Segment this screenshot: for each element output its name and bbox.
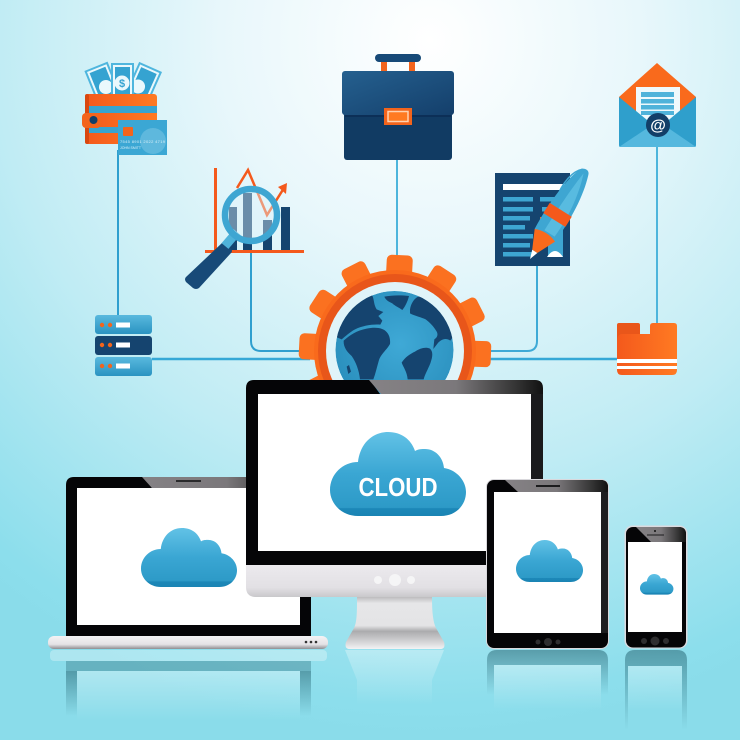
- laptop cloud: [141, 528, 237, 587]
- laptop reflection: [50, 650, 327, 721]
- connector lines: [118, 147, 657, 359]
- tablet screen: [494, 492, 601, 633]
- chart axes: [205, 168, 304, 253]
- tablet buttons: [536, 638, 560, 646]
- monitor chin: [246, 565, 543, 597]
- credit card: [118, 120, 167, 155]
- phone screen: [628, 542, 682, 632]
- cloud with label: CLOUD: [358, 472, 438, 502]
- icon: envelope with at sign: @: [650, 118, 666, 134]
- wallet body: [82, 94, 157, 144]
- icon: folder: [617, 323, 677, 375]
- continents: [337, 295, 453, 379]
- desktop monitor: [246, 380, 543, 649]
- cloud with label: [330, 432, 466, 516]
- stand: [346, 597, 444, 649]
- trend arrow: [237, 170, 287, 215]
- tablet reflection: [487, 650, 608, 710]
- icon: chart with magnifying glass: [185, 168, 304, 289]
- phone cloud: [640, 574, 673, 595]
- monitor stand reflection: [345, 650, 444, 705]
- pen: [519, 162, 597, 266]
- laptop: [48, 477, 328, 649]
- document: [495, 173, 570, 266]
- icon: briefcase: [342, 54, 454, 160]
- icon: document and pen: [495, 162, 597, 266]
- laptop screen: [77, 488, 300, 625]
- smartphone: [624, 526, 688, 648]
- credit card: JOHN SMITT: [120, 146, 142, 150]
- credit card: 7545 8901 2022 4719: [120, 139, 166, 144]
- monitor frame: [246, 380, 531, 565]
- device reflections: [50, 650, 687, 730]
- phone reflection: [625, 650, 687, 730]
- globe: [336, 291, 454, 394]
- magnifying glass: [185, 189, 277, 289]
- bars: [229, 193, 290, 250]
- monitor screen: [258, 394, 531, 551]
- laptop base: [48, 636, 328, 649]
- icon: gear with globe: [298, 254, 492, 394]
- phone buttons: [641, 636, 669, 646]
- icon: banknotes: $: [119, 78, 125, 90]
- icon: server stack: [95, 315, 152, 376]
- icon: envelope with at sign: [619, 63, 696, 147]
- laptop lid: [66, 477, 311, 636]
- tablet: [486, 479, 609, 649]
- gear teeth: [298, 254, 491, 413]
- icon: wallet with cash and credit card: [82, 63, 167, 155]
- tablet cloud: [516, 540, 583, 582]
- gear ring: [314, 270, 476, 432]
